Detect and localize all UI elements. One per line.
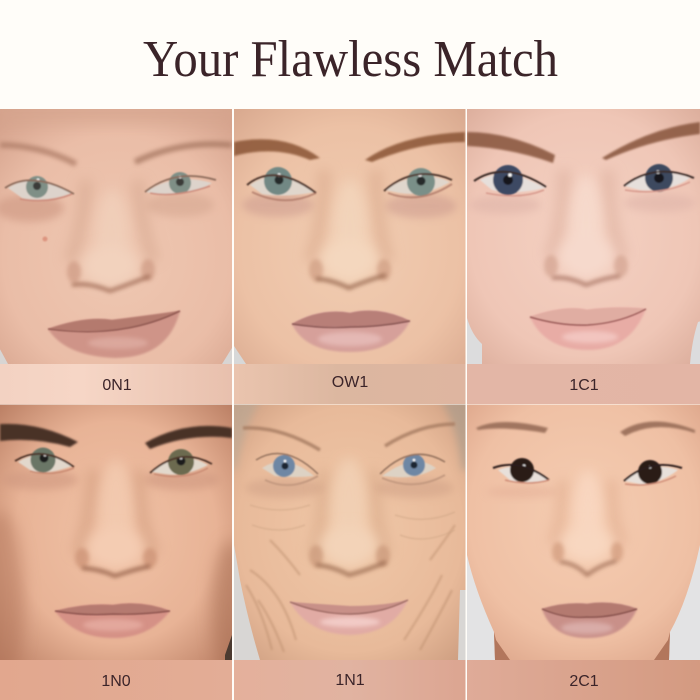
label bar 1C1 xyxy=(467,364,700,404)
label bar 1N1 xyxy=(234,660,466,700)
label bar 0N1 xyxy=(0,364,232,404)
label bar 1N1: 1N1 xyxy=(335,672,365,689)
label bar 0N1: 0N1 xyxy=(102,377,132,394)
label bar 2C1 xyxy=(467,660,700,700)
panel: face 0W1 xyxy=(230,105,470,364)
panel: face 1C1 xyxy=(462,105,700,364)
label bar 1N0 xyxy=(0,660,232,700)
panel: face 1N1 xyxy=(230,400,470,660)
label bar 1N0: 1N0 xyxy=(101,673,131,690)
panel: face 1N0 xyxy=(0,404,232,660)
title: Your Flawless Match xyxy=(143,31,558,88)
label bar OW1 xyxy=(234,364,466,404)
label bar OW1: OW1 xyxy=(332,374,368,391)
panel: face 2C1 xyxy=(462,400,700,660)
panel: face 0N1 xyxy=(0,100,240,364)
label bar 2C1: 2C1 xyxy=(569,673,599,690)
label bar 1C1: 1C1 xyxy=(569,377,599,394)
